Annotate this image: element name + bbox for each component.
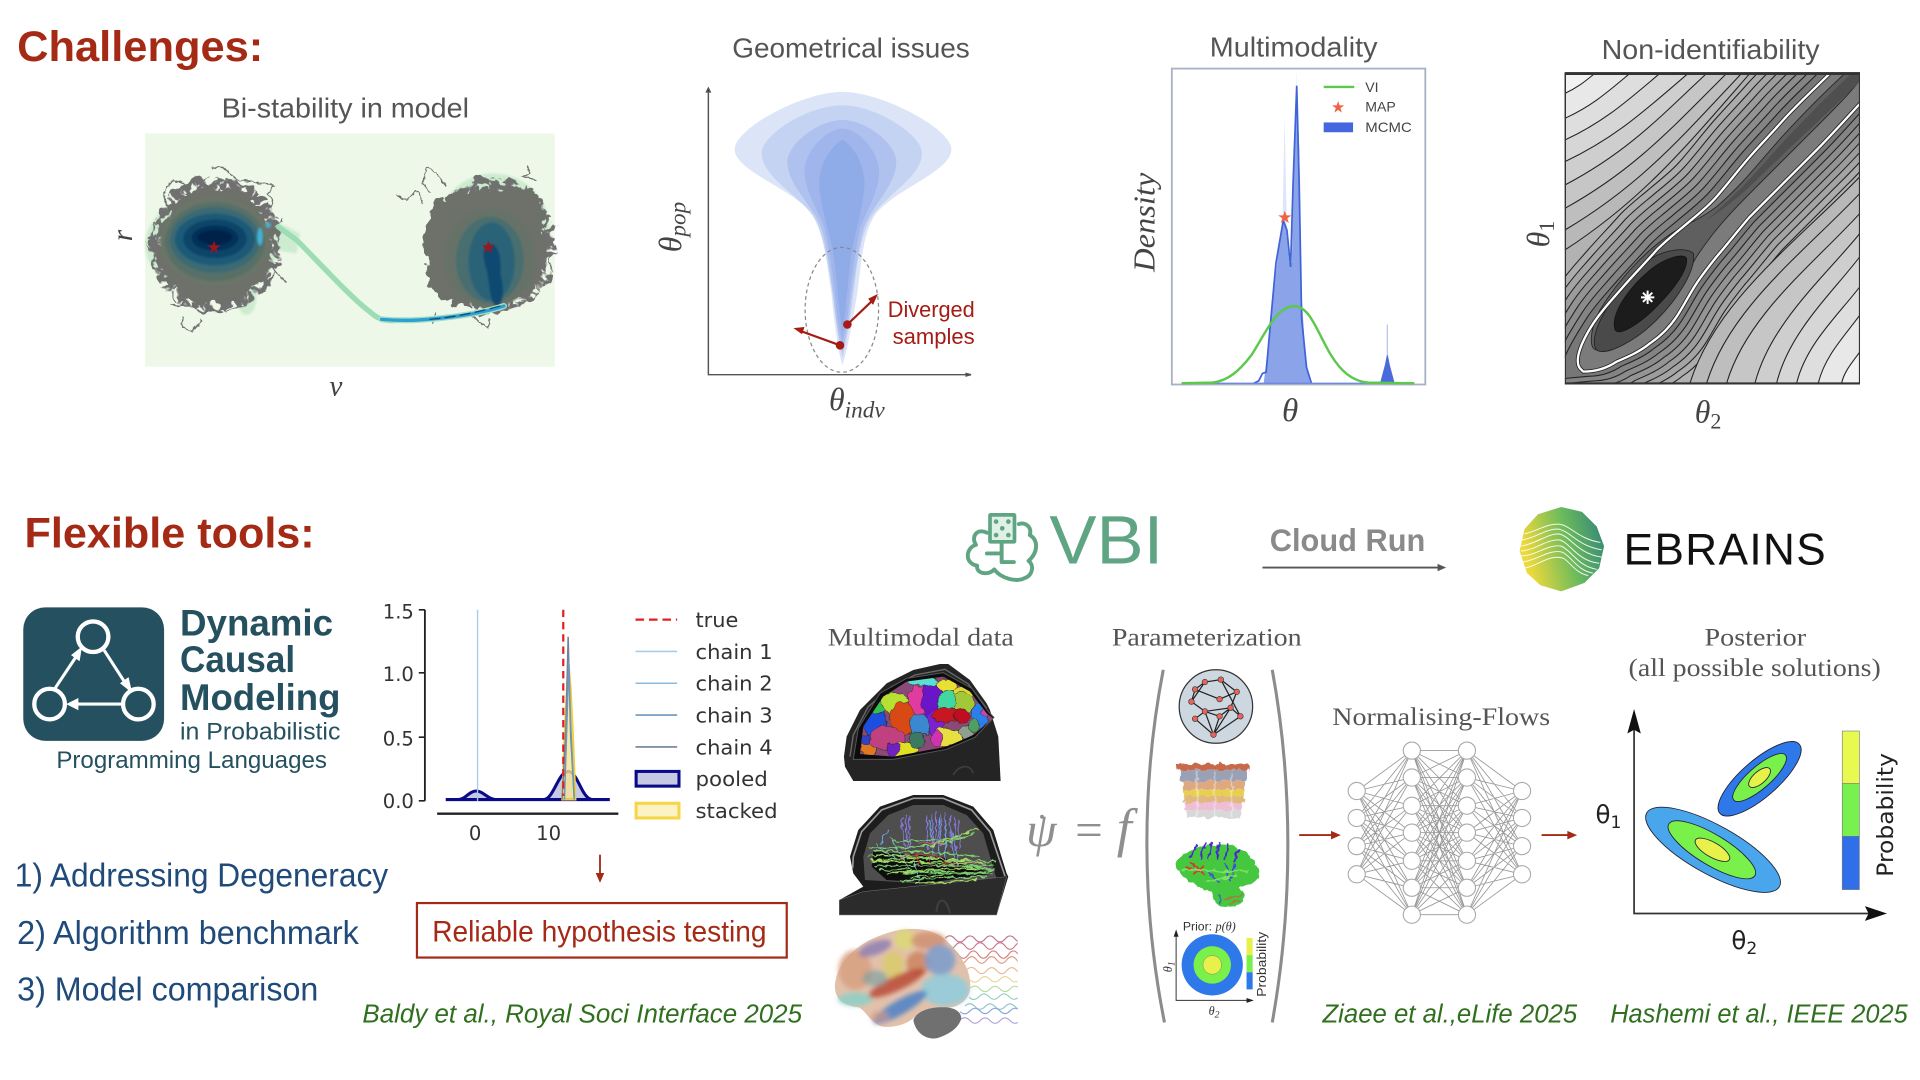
minimum core: [1614, 256, 1687, 332]
panel: multimodal data: [828, 622, 1030, 1038]
cerebellum: [913, 1007, 961, 1038]
title: non-identifiability: Non-identifiability: [1602, 34, 1821, 65]
axis label theta pop: pop: [666, 202, 692, 239]
legend: stacked: [696, 799, 778, 823]
axes: [707, 88, 971, 376]
upper left contours: [1564, 72, 1820, 359]
true value line: [562, 610, 564, 796]
arrow: down to hypothesis testing: [596, 855, 604, 883]
axis label theta indv: indv: [845, 398, 885, 424]
brain volume: [835, 929, 970, 1027]
equation: =: [1075, 802, 1103, 857]
diverged samples label: samples: [893, 324, 975, 349]
image: brain with source signals: [835, 929, 1030, 1038]
wordmark: Causal: [180, 639, 295, 680]
plot frame: [1172, 69, 1425, 384]
left attractor density: [160, 197, 271, 287]
title: multimodal data: Multimodal data: [828, 622, 1015, 651]
axis label theta 2: 2: [1710, 409, 1721, 434]
panel: posterior: [1596, 622, 1899, 959]
chart: chain densities: [383, 600, 778, 845]
chart: prior: 1: [1166, 961, 1177, 966]
chart: prior: θ: [1161, 966, 1175, 972]
title: posterior: [1629, 622, 1881, 682]
legend: chain 1: [696, 640, 773, 664]
colorbar label: Probability: [1874, 753, 1899, 877]
legend: pooled: [696, 767, 768, 791]
transition trajectory: [278, 227, 504, 321]
legend: MCMC: [1365, 119, 1412, 135]
upper posterior mode: [1708, 730, 1811, 827]
axis label r: r: [107, 229, 139, 241]
legend: MAP: [1365, 98, 1396, 114]
title: normalising flows: Normalising-Flows: [1332, 702, 1550, 731]
axis label theta indv: θ: [829, 382, 845, 417]
network edges: [1357, 751, 1522, 915]
colorbar: [1842, 731, 1859, 890]
axis label v: v: [329, 371, 343, 403]
fixed point stars: ★: [481, 238, 496, 258]
icon: network circle: [1179, 670, 1253, 743]
axis label theta 2: θ: [1731, 926, 1746, 955]
frame: [1565, 72, 1860, 384]
panel: non-identifiability: [1414, 0, 1920, 526]
axis label theta 2: θ: [1695, 394, 1710, 429]
callout: reliable hypothesis testing: Reliable hypothesis testing: [432, 916, 767, 949]
network nodes: [1348, 742, 1531, 923]
right attractor density: [445, 208, 535, 308]
list: contributions: [15, 858, 389, 1008]
wordmark: [56, 603, 340, 774]
callout: reliable hypothesis testing: [417, 903, 787, 958]
wordmark: in Probabilistic: [180, 719, 340, 746]
icon: brain with die: [968, 513, 1036, 580]
chart: prior: θ: [1209, 1004, 1215, 1018]
y axis: 0.5: [383, 728, 414, 751]
x axis: 0: [469, 822, 481, 845]
valley floor: [1578, 70, 1863, 372]
chain traces: [478, 610, 574, 801]
panel: parameterization: [1112, 622, 1302, 1022]
contour map: [1564, 72, 1860, 384]
axis label theta 1: θ: [1521, 232, 1556, 247]
title: multimodality: Multimodality: [1210, 31, 1378, 62]
legend: VI: [1365, 79, 1379, 95]
list: contributions: 1) Addressing Degeneracy: [15, 858, 389, 895]
wordmark: Programming Languages: [56, 747, 327, 774]
panel: normalising flows network: [1332, 702, 1550, 923]
VI curve: [1182, 306, 1414, 383]
panel: multimodality: [1128, 31, 1425, 429]
lower posterior mode: [1635, 792, 1791, 908]
valley dark strip: [1707, 73, 1860, 220]
brackets: [1147, 670, 1288, 1022]
wordmark: Modeling: [180, 677, 340, 718]
gray trajectories, dense mass: [158, 187, 545, 305]
legend: [1324, 79, 1412, 135]
fixed point stars: [206, 238, 496, 258]
pooled density: [446, 771, 610, 800]
heading: flexible tools: Flexible tools:: [24, 509, 315, 557]
legend: chain 2: [696, 672, 773, 696]
loose trajectory loops: [164, 165, 537, 332]
axis label theta 1: 1: [1610, 813, 1621, 833]
title: posterior: (all possible solutions): [1629, 653, 1881, 682]
signal traces: [945, 935, 1018, 1024]
minimum surround: [1594, 250, 1694, 351]
equation: ψ: [1026, 802, 1058, 857]
valley inner band: [1591, 73, 1860, 351]
optimum star: [1641, 291, 1654, 304]
cloud run arrow: [1262, 522, 1446, 571]
logo: EBRAINS: [1520, 507, 1826, 591]
wordmark VBI: VBI: [1049, 501, 1163, 578]
dashed ellipse: [805, 247, 879, 372]
MCMC density: [1182, 70, 1414, 383]
legend: chain 4: [696, 735, 773, 759]
contour base: [1563, 72, 1863, 385]
citation: Baldy: Baldy et al., Royal Soci Interface 2025: [362, 1000, 803, 1028]
fixed point stars: ★: [206, 238, 222, 258]
legend: true: [696, 608, 738, 632]
phase plane drawing: [145, 165, 556, 332]
axis label theta pop: θ: [653, 237, 688, 252]
icon: graph triangle: [23, 607, 164, 741]
y axis: [383, 600, 425, 813]
citation: Hashemi: Hashemi et al., IEEE 2025: [1610, 1000, 1908, 1028]
lower right contours: [1564, 114, 1859, 384]
list: contributions: 2) Algorithm benchmark: [17, 915, 359, 952]
panel: geometrical issues: [653, 33, 975, 424]
arrow: to posterior: [1542, 831, 1577, 839]
density halos: [145, 173, 550, 315]
y axis: 1.0: [383, 663, 414, 686]
image: tractography brain: [839, 795, 1008, 915]
heading: Challenges: Challenges:: [17, 23, 263, 71]
diverged samples label: Diverged: [888, 297, 975, 322]
list: contributions: 3) Model comparison: [17, 971, 318, 1008]
equation: [1026, 798, 1139, 858]
chart: prior: [1161, 920, 1269, 1021]
citation: Ziaee: Ziaee et al.,eLife 2025: [1321, 1000, 1578, 1028]
legend: chain 3: [696, 703, 773, 727]
axis label theta 1: 1: [1534, 221, 1559, 232]
y axis: 0.0: [383, 790, 414, 813]
chart: prior: Prior: p(θ): [1183, 920, 1236, 934]
MAP star: ★: [1277, 208, 1293, 228]
wordmark: Dynamic: [180, 603, 333, 644]
title: geometrical: Geometrical issues: [732, 33, 970, 64]
chart: prior: 2: [1215, 1010, 1220, 1021]
icon: tract brain: [1176, 841, 1259, 907]
phase plane background: [145, 133, 555, 367]
axis label theta 1: θ: [1596, 800, 1610, 829]
image: parcellated brain: [844, 664, 1001, 781]
icon: EBRAINS sphere: [1520, 507, 1604, 591]
axis label density: Density: [1128, 172, 1162, 273]
arrow: to normalising flows: [1299, 831, 1341, 839]
gray trajectories, loose texture: [149, 177, 556, 313]
stacked density: [562, 659, 576, 800]
y axis: 1.5: [383, 600, 414, 623]
funnel density layers: [735, 92, 951, 365]
logo: dynamic causal modeling: [23, 603, 340, 774]
title: posterior: Posterior: [1704, 622, 1807, 651]
chart: prior: Probability: [1254, 931, 1269, 997]
title: bi-stability: Bi-stability in model: [222, 93, 469, 124]
panel: bi-stability in model: [107, 93, 556, 403]
icon: laminar microcircuit: [1177, 764, 1250, 818]
equation: f: [1117, 798, 1139, 858]
axis label theta 2: 2: [1746, 939, 1757, 959]
x axis: [437, 814, 618, 845]
axis label theta: θ: [1282, 393, 1298, 429]
white contour: [1578, 70, 1863, 372]
title: parameterization: Parameterization: [1112, 622, 1302, 651]
diverged samples label: [888, 297, 975, 349]
axes: [1627, 709, 1887, 921]
legend: [636, 608, 778, 823]
divergence arrows: [793, 294, 878, 350]
logo: VBI: [968, 501, 1163, 580]
wordmark EBRAINS: EBRAINS: [1624, 525, 1826, 574]
cloud run arrow: Cloud Run: [1270, 522, 1425, 558]
legend: ★: [1331, 98, 1345, 117]
x axis: 10: [536, 822, 561, 845]
